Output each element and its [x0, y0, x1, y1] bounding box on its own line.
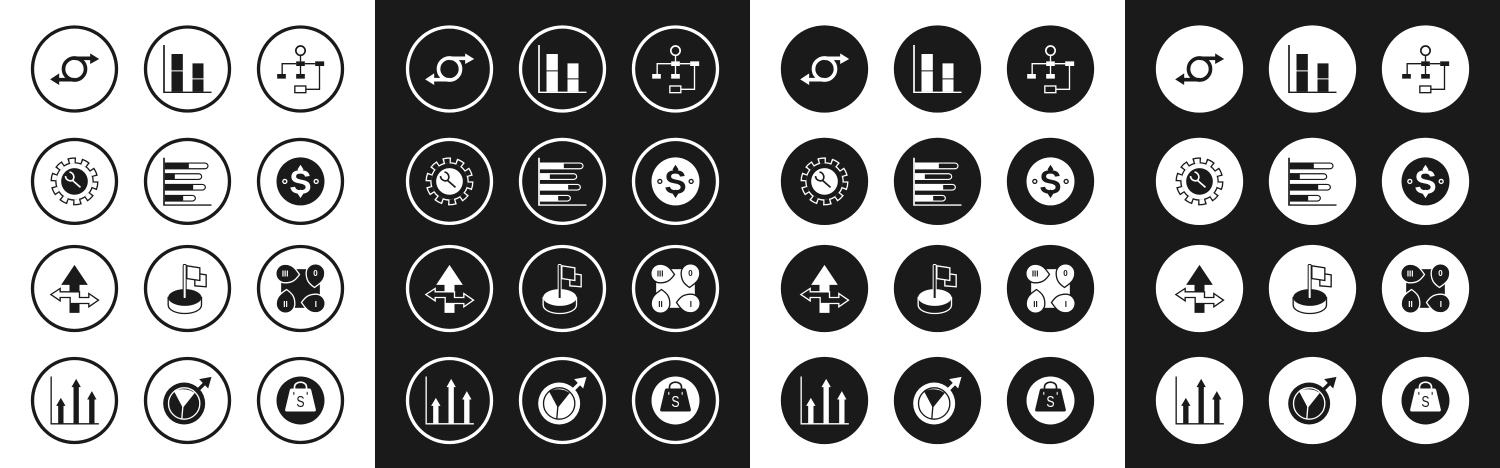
icon: flag on platform [521, 247, 604, 330]
icon: pie chart with arrow [896, 359, 979, 442]
panel: dark outlined icons [375, 0, 750, 468]
icon: flowchart [259, 27, 342, 111]
icon: opposing arrows through ring [408, 27, 491, 111]
icon: stacked bar chart [896, 27, 979, 111]
icon: four step badges: II [1408, 300, 1413, 309]
icon: dollar coin [259, 139, 342, 223]
icon: shopping bag with S [634, 359, 717, 442]
icon: dollar coin: S [664, 164, 687, 201]
panel: dark background with white discs [1125, 0, 1500, 468]
panel: white outlined icons [0, 0, 375, 468]
icon: four step badges: I [1065, 300, 1067, 309]
icon: four step badges: II [1033, 300, 1038, 309]
icon: four step badges: III [657, 270, 663, 279]
icon: four step badges: I [315, 300, 317, 309]
icon: dollar coin: S [1039, 164, 1062, 201]
icon: four step badges [634, 247, 717, 330]
icon: dollar coin [1009, 139, 1092, 223]
icon: four step badges: III [1407, 270, 1413, 279]
icon: rising arrow chart [33, 359, 116, 442]
icon: crossing direction arrows [408, 247, 491, 330]
icon: four step badges: I [1440, 300, 1442, 309]
icon: horizontal bar chart [146, 139, 229, 223]
icon: dollar coin: S [289, 164, 312, 201]
icon: gear with wrench [33, 139, 116, 223]
icon: crossing direction arrows [783, 247, 866, 330]
icon: dollar coin: S [1414, 164, 1437, 201]
icon: rising arrow chart [783, 359, 866, 442]
icon: four step badges: II [658, 300, 663, 309]
icon: four step badges [1009, 247, 1092, 330]
icon: horizontal bar chart [1271, 139, 1354, 223]
icon: rising arrow chart [408, 359, 491, 442]
icon: flag on platform [896, 247, 979, 330]
icon: opposing arrows through ring [1158, 27, 1241, 111]
icon: crossing direction arrows [33, 247, 116, 330]
icon: four step badges: 0 [1063, 269, 1068, 278]
icon: flowchart [634, 27, 717, 111]
icon: pie chart with arrow [146, 359, 229, 442]
icon: four step badges: III [1032, 270, 1038, 279]
icon: opposing arrows through ring [33, 27, 116, 111]
icon: stacked bar chart [521, 27, 604, 111]
icon: crossing direction arrows [1158, 247, 1241, 330]
icon: four step badges: II [283, 300, 288, 309]
icon: shopping bag with S [259, 359, 342, 442]
icon: stacked bar chart [146, 27, 229, 111]
icon: shopping bag with S [1009, 359, 1092, 442]
icon: shopping bag with S [1384, 359, 1467, 442]
icon: pie chart with arrow [521, 359, 604, 442]
icon: dollar coin [1384, 139, 1467, 223]
icon: gear with wrench [1158, 139, 1241, 223]
icon: four step badges: 0 [688, 269, 693, 278]
icon: four step badges: I [690, 300, 692, 309]
icon: pie chart with arrow [1271, 359, 1354, 442]
icon: dollar coin [634, 139, 717, 223]
icon: shopping bag with S: S [1421, 393, 1430, 410]
icon: horizontal bar chart [521, 139, 604, 223]
icon: four step badges: III [282, 270, 288, 279]
icon: shopping bag with S: S [1046, 393, 1055, 410]
icon: gear with wrench [408, 139, 491, 223]
icon: four step badges: 0 [1438, 269, 1443, 278]
icon: stacked bar chart [1271, 27, 1354, 111]
icon: opposing arrows through ring [783, 27, 866, 111]
icon: flag on platform [146, 247, 229, 330]
icon: rising arrow chart [1158, 359, 1241, 442]
icon: shopping bag with S: S [671, 393, 680, 410]
icon: shopping bag with S: S [296, 393, 305, 410]
panel: white background with dark discs [750, 0, 1125, 468]
icon: flag on platform [1271, 247, 1354, 330]
icon: horizontal bar chart [896, 139, 979, 223]
icon: flowchart [1009, 27, 1092, 111]
icon: four step badges: 0 [313, 269, 318, 278]
icon: gear with wrench [783, 139, 866, 223]
icon: four step badges [1384, 247, 1467, 330]
icon: four step badges [259, 247, 342, 330]
icon: flowchart [1384, 27, 1467, 111]
